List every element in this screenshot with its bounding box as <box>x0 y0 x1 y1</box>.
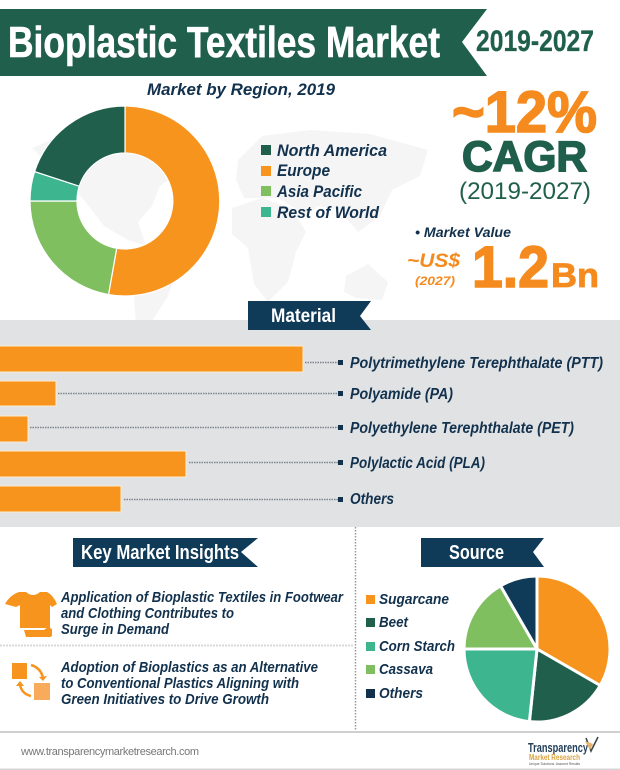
insight text 2 <box>60 659 318 708</box>
world map background <box>32 128 428 334</box>
CAGR callout: (2019-2027) <box>459 178 591 205</box>
source legend: Others <box>379 685 423 702</box>
bar labels <box>350 355 603 508</box>
bar labels: Others <box>350 491 394 508</box>
logo: Unique Solutions. Assured Results <box>529 762 580 766</box>
region legend: Asia Pacific <box>276 182 362 201</box>
pie chart: source <box>464 576 610 722</box>
market value callout: • Market Value <box>415 224 511 240</box>
insight text 1: Surge in Demand <box>61 621 170 638</box>
bar labels: Polyamide (PA) <box>350 386 453 403</box>
market value callout: Bn <box>551 257 599 295</box>
title banner <box>0 9 487 76</box>
bar labels: Polylactic Acid (PLA) <box>350 455 485 472</box>
title text: Bioplastic Textiles Market <box>8 18 440 67</box>
insight text 2: Green Initiatives to Drive Growth <box>61 691 269 708</box>
region legend: Europe <box>277 161 330 180</box>
source heading <box>421 538 544 567</box>
website url: www.transparencymarketresearch.com <box>20 746 199 758</box>
source heading: Source <box>449 542 504 564</box>
CAGR callout: CAGR <box>462 133 587 181</box>
region chart heading: Market by Region, 2019 <box>147 80 336 99</box>
market value callout: (2027) <box>415 274 455 288</box>
region legend <box>261 141 387 222</box>
source legend <box>366 591 455 702</box>
key market insights heading <box>73 538 258 567</box>
panel: material <box>0 301 620 527</box>
CAGR callout: ~12% <box>452 80 597 145</box>
insight text 1: and Clothing Contributes to <box>61 605 234 622</box>
icon: t-shirt and shoe <box>5 592 57 637</box>
bar labels: Polyethylene Terephthalate (PET) <box>350 420 574 437</box>
bar connectors <box>30 362 339 500</box>
source legend: Beet <box>379 614 409 631</box>
insight text 1 <box>60 589 344 638</box>
market value callout: ~US$ <box>407 251 460 272</box>
source legend: Cassava <box>379 661 433 678</box>
insight text 1: Application of Bioplastic Textiles in Footwear <box>60 589 344 606</box>
region legend: North America <box>277 141 387 160</box>
CAGR callout <box>452 80 597 205</box>
market value callout: 1.2 <box>472 235 549 300</box>
year range: 2019-2027 <box>476 25 594 58</box>
section dividers <box>0 527 620 770</box>
bar markers <box>338 360 343 502</box>
insight text 2: to Conventional Plastics Aligning with <box>61 675 299 692</box>
logo: Market Research <box>529 753 580 762</box>
material heading: Material <box>271 306 336 327</box>
source legend: Corn Starch <box>379 638 455 655</box>
region legend: Rest of World <box>277 203 380 222</box>
insight text 2: Adoption of Bioplastics as an Alternative <box>60 659 318 676</box>
icon: material conversion <box>12 663 50 700</box>
bar chart: material <box>0 346 303 512</box>
logo <box>528 737 598 766</box>
key market insights heading: Key Market Insights <box>81 542 239 564</box>
donut chart: market by region <box>30 106 220 296</box>
logo: Transparency <box>528 740 589 755</box>
material heading <box>248 301 371 330</box>
source legend: Sugarcane <box>379 591 449 608</box>
market value callout <box>407 224 599 300</box>
